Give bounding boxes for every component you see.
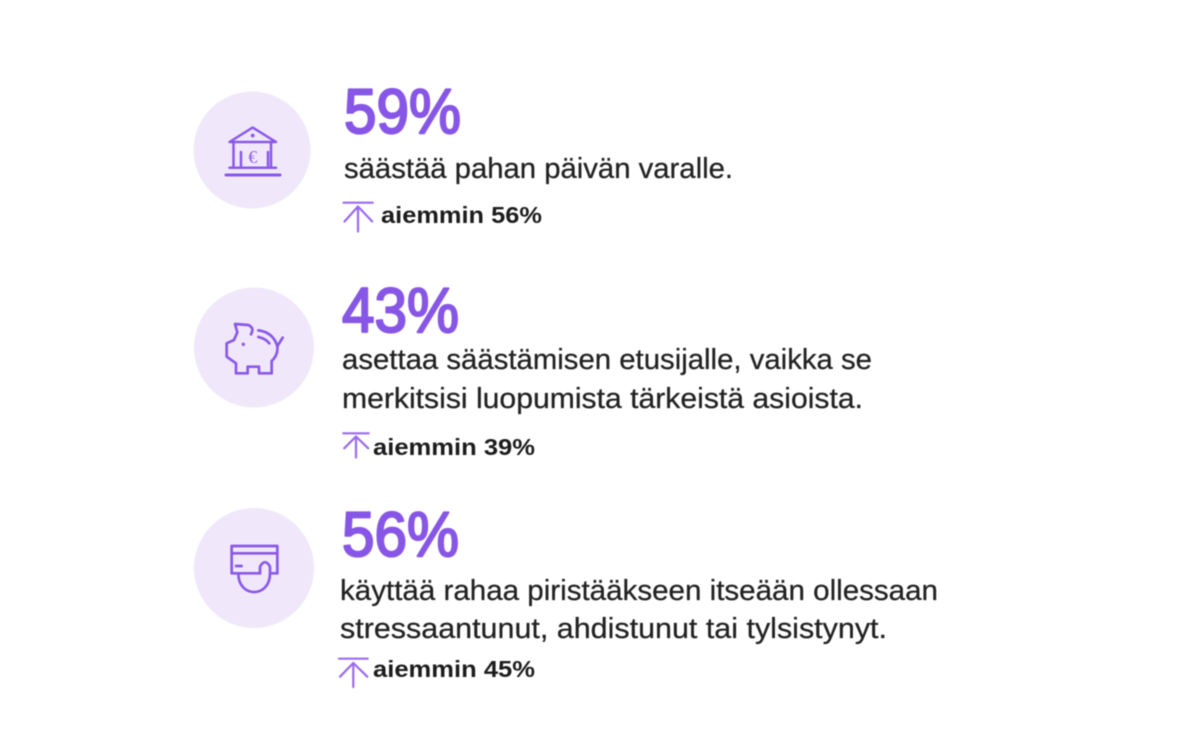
statistic: 59%: 59% bbox=[344, 77, 461, 147]
arrow: up from previous bbox=[344, 203, 373, 232]
arrow: up from previous bbox=[343, 433, 369, 458]
panel: spending when stressed bbox=[194, 500, 938, 687]
icon: hand holding payment card bbox=[194, 508, 314, 628]
text: description: säästää pahan päivän varalle. bbox=[344, 153, 733, 185]
icon: piggy bank bbox=[194, 288, 314, 408]
arrow: up from previous bbox=[339, 659, 368, 687]
text: description bbox=[340, 575, 938, 645]
text: previous value: aiemmin 39% bbox=[373, 434, 535, 460]
text: description: asettaa säästämisen etusijalle, vaikka se bbox=[342, 344, 872, 376]
panel: prioritising saving bbox=[194, 276, 872, 460]
statistic: 56%: 56% bbox=[342, 500, 459, 570]
icon: bank with euro sign bbox=[194, 92, 310, 208]
icon: bank with euro sign: € bbox=[248, 147, 257, 167]
text: description bbox=[342, 344, 872, 415]
text: description: käyttää rahaa piristääkseen itseään ollessaan bbox=[340, 575, 938, 607]
text: previous value: aiemmin 56% bbox=[381, 202, 542, 228]
text: previous value: aiemmin 45% bbox=[373, 656, 535, 682]
text: description: stressaantunut, ahdistunut tai tylsistynyt. bbox=[340, 613, 887, 645]
text: description: merkitsisi luopumista tärkeistä asioista. bbox=[342, 383, 863, 415]
statistic: 43%: 43% bbox=[342, 276, 459, 346]
panel: savings for a rainy day bbox=[194, 77, 733, 232]
